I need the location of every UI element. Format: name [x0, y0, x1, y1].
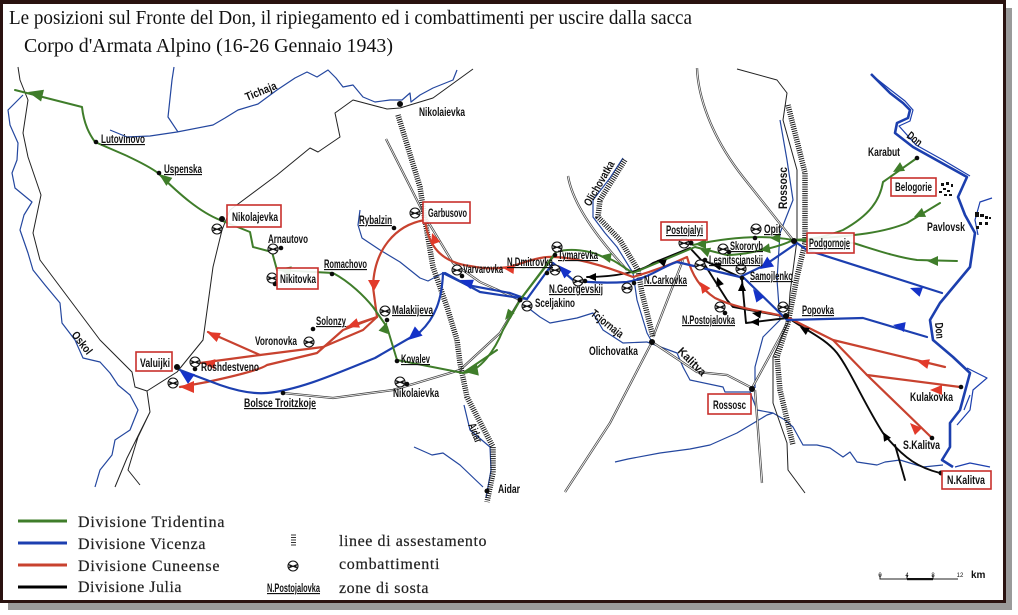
place names: Podgornoje	[809, 238, 850, 250]
place names: Pavlovsk	[927, 222, 965, 234]
river: Oskol	[8, 95, 138, 487]
place names: Kovalev	[401, 354, 430, 366]
legend item: defensive lines: linee di assestamento	[339, 533, 487, 550]
combat markers	[168, 208, 788, 388]
place names: Popovka	[802, 305, 834, 317]
place names: Belogorie	[895, 182, 932, 194]
river: Olichovatka	[593, 158, 652, 342]
river: Tichaja	[110, 70, 457, 137]
river: Rossosc	[755, 120, 793, 388]
legend item: rest areas: zone di sosta	[339, 580, 429, 597]
place names: Tymarevka	[558, 250, 598, 262]
place names: Karabut	[868, 147, 900, 159]
route: Divisione Cuneense	[180, 220, 960, 438]
city blocks: Belogorie and Pavlovsk	[939, 182, 991, 229]
river: Rybalzin stream	[358, 210, 443, 281]
scale bar: 8	[931, 573, 935, 579]
scale bar	[878, 570, 986, 581]
town dots	[94, 101, 963, 494]
river names	[69, 80, 945, 445]
place names: Nikolaievka	[393, 388, 439, 400]
legend item: Vicenza	[18, 536, 206, 553]
river names: Tcjornaja	[588, 308, 626, 341]
railways	[18, 67, 805, 493]
scale bar: 0	[878, 573, 882, 579]
green arrows	[27, 86, 938, 378]
red arrows	[180, 231, 942, 435]
river names: Don	[932, 322, 945, 339]
river names: Rossosc	[778, 166, 790, 209]
place names	[101, 107, 985, 496]
place names: S.Kalitva	[903, 440, 940, 452]
place names: Romachovo	[324, 259, 367, 271]
title	[9, 7, 692, 57]
river: Don	[871, 74, 975, 467]
rivers	[8, 67, 992, 498]
place names: Aidar	[498, 484, 520, 496]
place names: Opit	[764, 224, 781, 236]
blue arrows	[177, 257, 923, 384]
railway: west line	[18, 67, 473, 391]
place names: Roshdestveno	[201, 362, 259, 374]
legend item: combat: combattimenti	[339, 556, 440, 573]
hatched line: Rossosc	[777, 105, 805, 445]
legend item: rest areas: N.Postojalovka	[267, 583, 320, 595]
place names: Samojlenko	[750, 271, 793, 283]
legend item: Vicenza: Divisione Vicenza	[78, 536, 206, 553]
place names: Garbusovo	[428, 208, 467, 220]
river names: Kalitva	[675, 346, 709, 379]
place names: Rybalzin	[359, 215, 392, 227]
river names: Aidar	[465, 422, 484, 445]
legend: symbols	[267, 533, 487, 597]
place names: Sceljakino	[535, 298, 575, 310]
place names: Rossosc	[713, 400, 746, 412]
title: Corpo d'Armata Alpino (16-26 Gennaio 1943)	[24, 35, 393, 57]
place names: Nikolajevka	[232, 212, 278, 224]
scale bar: 12	[957, 573, 964, 579]
legend item: combat	[288, 556, 440, 573]
route: Divisione Julia	[587, 248, 940, 480]
river: Tcjornaja	[527, 307, 647, 343]
place names: Lutovinovo	[101, 134, 145, 146]
river: Kalitva	[647, 342, 943, 467]
place names: Voronovka	[255, 336, 297, 348]
place names: N.Postojalovka	[682, 315, 735, 327]
legend: divisions	[18, 514, 225, 596]
legend item: Cuneense: Divisione Cuneense	[78, 558, 220, 575]
place names: Skororyb	[730, 241, 763, 253]
river names: Olichovatka	[582, 159, 618, 208]
red boxed key towns	[136, 178, 991, 489]
railway: Rossosc line	[737, 69, 805, 493]
route: Divisione Tridentina	[15, 90, 957, 373]
place names: Lesnitscianskij	[709, 255, 763, 267]
river names: Oskol	[69, 329, 94, 357]
place names: Postojalyi	[666, 225, 703, 237]
hatched line: Aidar	[398, 115, 493, 502]
place names: N.Georgevskij	[549, 284, 603, 296]
title: Le posizioni sul Fronte del Don, il ripiegamento ed i combattimenti per uscire dalla sacca	[9, 7, 692, 29]
railway: south branches	[115, 391, 150, 487]
place names: Olichovatka	[589, 346, 638, 358]
scale bar: 4	[905, 573, 909, 579]
place names: Nikitovka	[280, 274, 316, 286]
place names: Valuijki	[140, 358, 170, 370]
legend item: Julia: Divisione Julia	[78, 579, 182, 596]
river: Tichaja branch	[168, 67, 178, 132]
place names: Bolsce Troitzkoje	[244, 398, 316, 410]
place names: Kulakovka	[910, 392, 953, 404]
river: Kalitva tributary	[615, 413, 773, 462]
defensive lines (hatched)	[398, 105, 805, 502]
place names: N.Kalitva	[947, 475, 985, 487]
place names: Arnautovo	[268, 234, 308, 246]
place names: Solonzy	[316, 316, 346, 328]
river: Don side branches	[873, 76, 992, 467]
route: Divisione Vicenza	[180, 243, 942, 393]
route arrowheads	[27, 86, 942, 442]
double-track roads	[283, 68, 793, 492]
river names: Tichaja	[244, 80, 279, 104]
river: Aidar	[414, 405, 491, 498]
black arrows	[587, 256, 891, 442]
legend item: rest areas	[267, 580, 429, 597]
hatched line: Olichovatka	[598, 160, 653, 337]
legend item: Tridentina: Divisione Tridentina	[78, 514, 225, 531]
legend item: Julia	[18, 579, 182, 596]
place names: Malakijeva	[392, 305, 433, 317]
place names: Uspenska	[164, 164, 202, 176]
place names: N.Carkovka	[644, 275, 687, 287]
river names: Don	[904, 130, 924, 149]
scale bar: km	[971, 570, 986, 581]
place names: N.Dmitrovka	[507, 257, 553, 269]
place names: Nikolaievka	[419, 107, 465, 119]
place names: Varvarovka	[463, 264, 503, 276]
